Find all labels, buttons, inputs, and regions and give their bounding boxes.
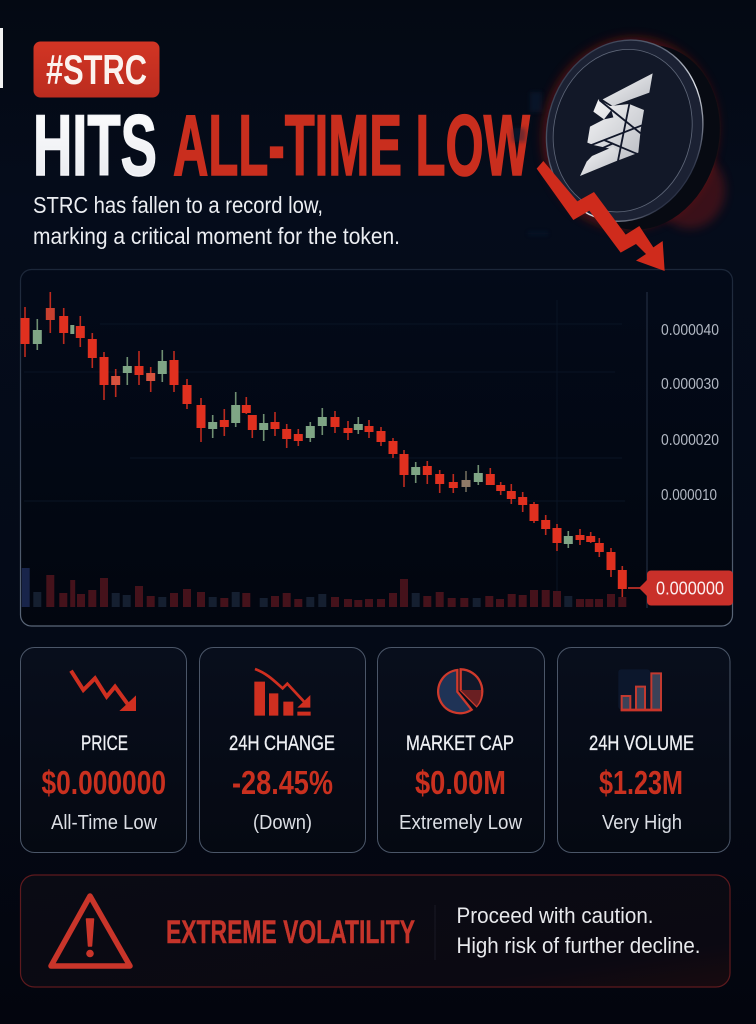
candlesticks	[25, 292, 622, 597]
panel: market cap stat: MARKET CAP	[406, 732, 514, 755]
subtitle: marking a critical moment for the token.	[33, 223, 400, 249]
panel: 24h change stat: 24H CHANGE	[229, 732, 335, 755]
icon: rising bars	[618, 669, 662, 710]
y axis labels: 0.000020	[661, 432, 719, 449]
panel: 24h change stat: -28.45%	[232, 764, 333, 801]
icon: coin	[522, 18, 739, 248]
icon: pie chart	[438, 669, 482, 713]
arrow: falling red zigzag	[537, 161, 665, 271]
coin edge	[546, 28, 739, 246]
title: HITS	[33, 98, 157, 194]
callout: current price: 0.000000	[656, 578, 724, 598]
callout: current price	[628, 570, 733, 606]
icon: falling bars	[254, 669, 311, 716]
panel: market cap stat: $0.00M	[415, 764, 506, 801]
icon: down trend	[71, 671, 136, 711]
panel: price stat: PRICE	[81, 732, 128, 755]
panel: 24h volume stat: 24H VOLUME	[589, 732, 694, 755]
panel: 24h change stat: (Down)	[253, 812, 312, 834]
panel: 24h volume stat: Very High	[602, 812, 682, 834]
warning heading: EXTREME VOLATILITY	[166, 914, 415, 950]
coin face	[528, 23, 722, 238]
panel: price chart	[20, 270, 733, 626]
icon: warning triangle	[51, 896, 130, 966]
volume bars	[26, 568, 622, 607]
y axis labels: 0.000010	[661, 487, 717, 504]
title	[33, 98, 530, 194]
subtitle	[33, 192, 400, 249]
panel: price stat: All-Time Low	[51, 812, 158, 834]
panel: 24h change stat	[200, 648, 366, 852]
panel: price stat: $0.000000	[42, 764, 166, 801]
faint background chart behind coin	[512, 92, 548, 235]
y axis labels: 0.000030	[661, 376, 719, 393]
warning text: High risk of further decline.	[456, 933, 700, 958]
subtitle: STRC has fallen to a record low,	[33, 192, 323, 218]
coin logo	[580, 73, 653, 176]
panel: 24h volume stat: $1.23M	[599, 764, 683, 801]
y axis labels	[661, 322, 719, 504]
panel: 24h volume stat	[558, 648, 730, 852]
panel: price stat	[20, 648, 186, 852]
coin red glow	[522, 18, 738, 248]
panel: market cap stat	[378, 648, 544, 852]
y axis labels: 0.000040	[661, 322, 719, 339]
white edge fragment	[0, 28, 3, 88]
panel: volatility warning	[20, 875, 730, 987]
badge: #STRC: #STRC	[46, 46, 147, 93]
warning text: Proceed with caution.	[456, 903, 654, 928]
panel: market cap stat: Extremely Low	[399, 812, 523, 834]
badge: #STRC	[34, 42, 160, 98]
warning text	[456, 903, 700, 958]
